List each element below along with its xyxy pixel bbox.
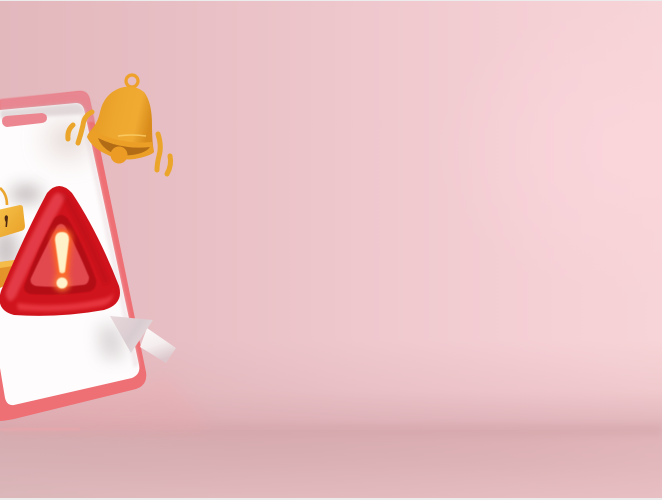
icon: bell vibration lines bbox=[68, 112, 171, 174]
phone screen bbox=[0, 103, 139, 405]
icon: bell bbox=[87, 75, 154, 164]
icon: alert triangle bbox=[0, 186, 120, 316]
phone bbox=[0, 91, 146, 421]
bell clapper bbox=[110, 146, 128, 164]
phone body bbox=[0, 91, 146, 421]
icon: padlock bbox=[0, 188, 25, 288]
screen shadows bbox=[0, 124, 124, 358]
icon: cursor arrow bbox=[110, 316, 176, 363]
phone speaker pill bbox=[2, 113, 47, 127]
exclamation mark bbox=[52, 229, 72, 291]
